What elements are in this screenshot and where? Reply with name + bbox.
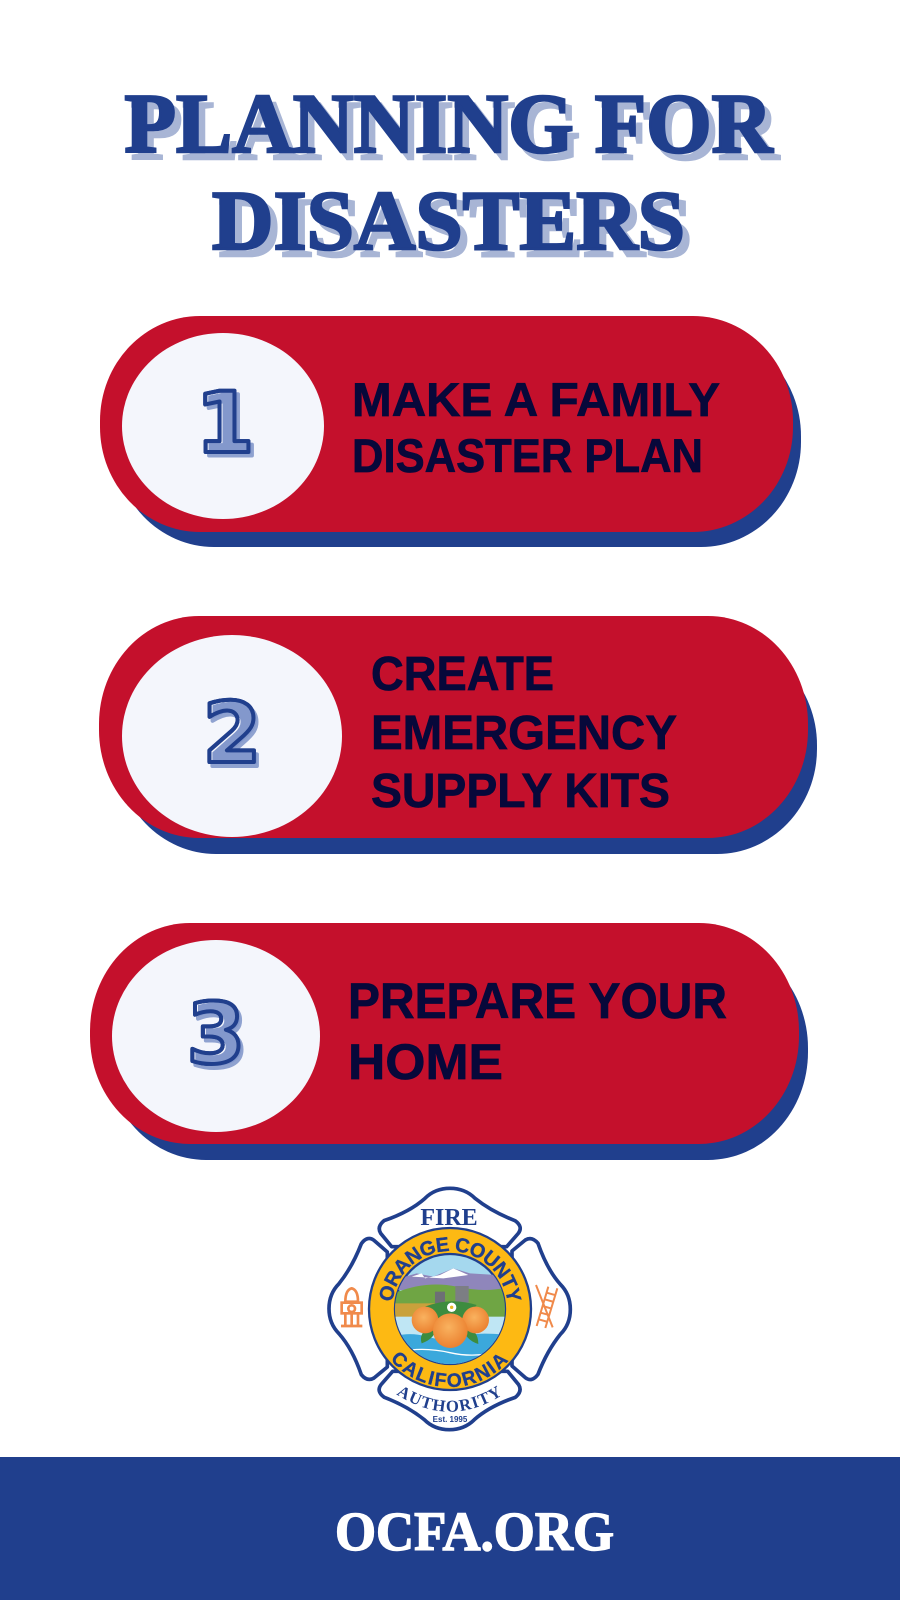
icon: fire hydrant: [341, 1288, 362, 1326]
footer band: [0, 1457, 900, 1600]
oranges: [412, 1301, 489, 1348]
logo: Orange County Fire Authority badge: CALIFORNIA: [392, 1352, 509, 1388]
step 3 text: PREPARE YOUR: [348, 973, 727, 1029]
cross arms: [329, 1188, 570, 1430]
title: PLANNING FOR: [131, 84, 781, 178]
step 3 number badge: 3: [190, 987, 248, 1085]
step 2 text: CREATE: [371, 648, 554, 701]
step 1 number badge: 1: [196, 374, 254, 472]
step 1 number badge: [122, 333, 324, 519]
panel: step 2: [99, 616, 817, 854]
scene: [393, 1268, 510, 1367]
step 2 number badge: [122, 635, 342, 837]
step 3 text: HOME: [348, 1034, 503, 1090]
step 2 text: [371, 648, 677, 818]
step 1 number badge: 1: [199, 378, 258, 476]
title: [124, 77, 781, 275]
step 2 number badge: 2: [206, 686, 264, 784]
title: DISASTERS: [219, 181, 692, 275]
logo: Orange County Fire Authority badge: AUTHORITY: [396, 1386, 500, 1412]
step 3 number badge: 3: [190, 989, 248, 1087]
footer website: OCFA.ORG: [335, 1501, 614, 1562]
panel: step 3: [90, 923, 808, 1160]
logo: Orange County Fire Authority badge: [327, 1186, 572, 1432]
step 3 text: [348, 973, 727, 1090]
step 3 number badge: [112, 940, 320, 1132]
step 3 number badge: 3: [187, 985, 245, 1083]
step 1 number badge: 1: [196, 374, 254, 472]
step 2 number badge: 2: [203, 684, 261, 782]
step 2 text: EMERGENCY: [371, 707, 677, 760]
step 1 text: MAKE A FAMILY: [352, 373, 720, 426]
title: PLANNING FOR: [124, 77, 774, 171]
arm lettering: FIRE: [420, 1205, 478, 1231]
step 2 number badge: 2: [203, 684, 261, 782]
panel: step 1: [100, 316, 801, 547]
ring lettering: ORANGE COUNTY: [380, 1236, 522, 1300]
logo: Orange County Fire Authority badge: Est. 1995: [433, 1415, 468, 1424]
step 1 number badge: 1: [199, 376, 257, 474]
step 3 number badge: 3: [187, 985, 245, 1083]
ring: [369, 1228, 531, 1390]
step 1 text: DISASTER PLAN: [352, 429, 703, 482]
step 2 text: SUPPLY KITS: [371, 765, 670, 818]
icon: ladder and axe: [536, 1285, 557, 1328]
step 2 number badge: 2: [206, 688, 264, 786]
title: DISASTERS: [212, 174, 685, 268]
step 1 text: [352, 373, 720, 482]
step 1 number badge: 1: [196, 374, 254, 472]
